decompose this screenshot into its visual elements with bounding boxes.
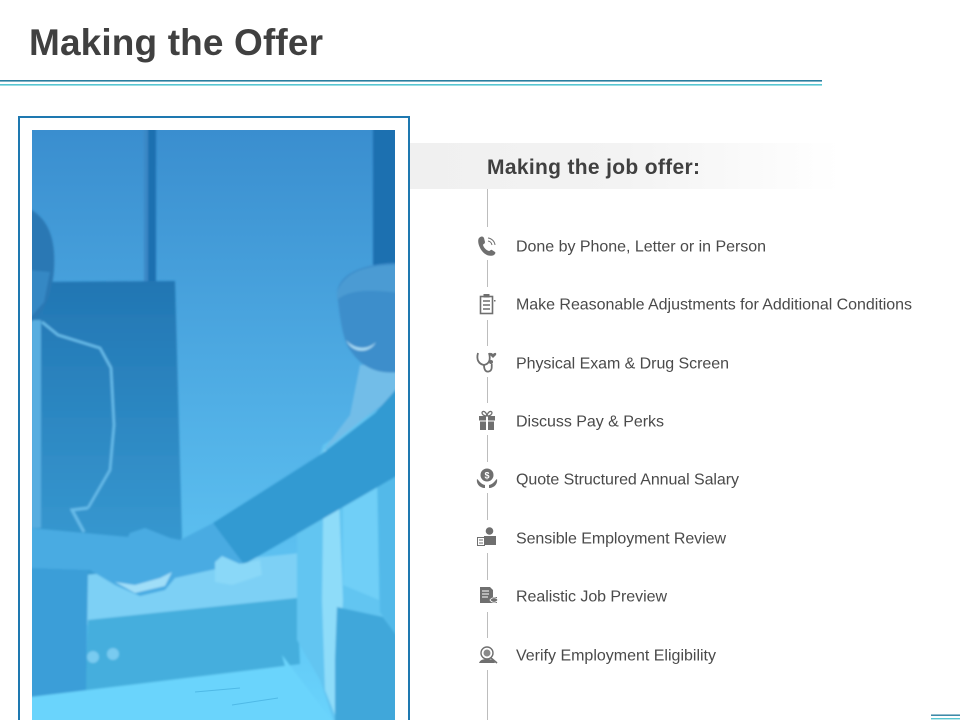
list of offer steps: Done by Phone, Letter or in Person xyxy=(516,238,766,256)
title: Making the Offer xyxy=(29,22,323,63)
photo frame xyxy=(19,117,409,720)
list of offer steps: Physical Exam & Drug Screen xyxy=(516,356,729,372)
timeline line xyxy=(486,189,488,720)
bottom paper xyxy=(32,656,290,699)
list of offer steps: Sensible Employment Review xyxy=(516,530,726,548)
desk xyxy=(85,553,300,625)
list of offer steps: Verify Employment Eligibility xyxy=(516,648,716,664)
icon: phone xyxy=(478,236,495,256)
photo: handshake with blue duotone xyxy=(28,125,400,720)
sleeve xyxy=(213,385,400,565)
dark panel and left person suit xyxy=(30,281,182,600)
right person neck and head xyxy=(326,262,395,448)
icon: gift xyxy=(479,411,495,430)
list of offer steps: Make Reasonable Adjustments for Additional Conditions xyxy=(516,296,912,314)
list of offer steps: Realistic Job Preview xyxy=(516,588,667,606)
heading: Making the job offer: xyxy=(487,156,700,179)
right person body xyxy=(297,395,400,720)
icon: money in hands: $ xyxy=(484,470,490,480)
heading band xyxy=(410,143,840,189)
icon: document with eye xyxy=(480,587,498,603)
forearm and hand xyxy=(30,523,243,596)
icon: person with document xyxy=(478,527,496,546)
icon: clipboard checklist xyxy=(480,294,496,314)
envelope on desk xyxy=(215,556,262,585)
list of offer steps: Discuss Pay & Perks xyxy=(516,414,664,430)
icon: person search xyxy=(479,647,497,663)
left person head xyxy=(32,210,55,322)
header rule xyxy=(0,80,822,86)
list of offer steps: Quote Structured Annual Salary xyxy=(516,472,739,488)
icon: money in hands xyxy=(477,468,497,488)
list of offer steps xyxy=(516,238,912,664)
left person trousers xyxy=(30,568,88,698)
left person lapel lines xyxy=(36,320,114,532)
icon: stethoscope with heart xyxy=(477,353,496,372)
window frames xyxy=(144,125,400,282)
footer rule xyxy=(931,714,960,719)
